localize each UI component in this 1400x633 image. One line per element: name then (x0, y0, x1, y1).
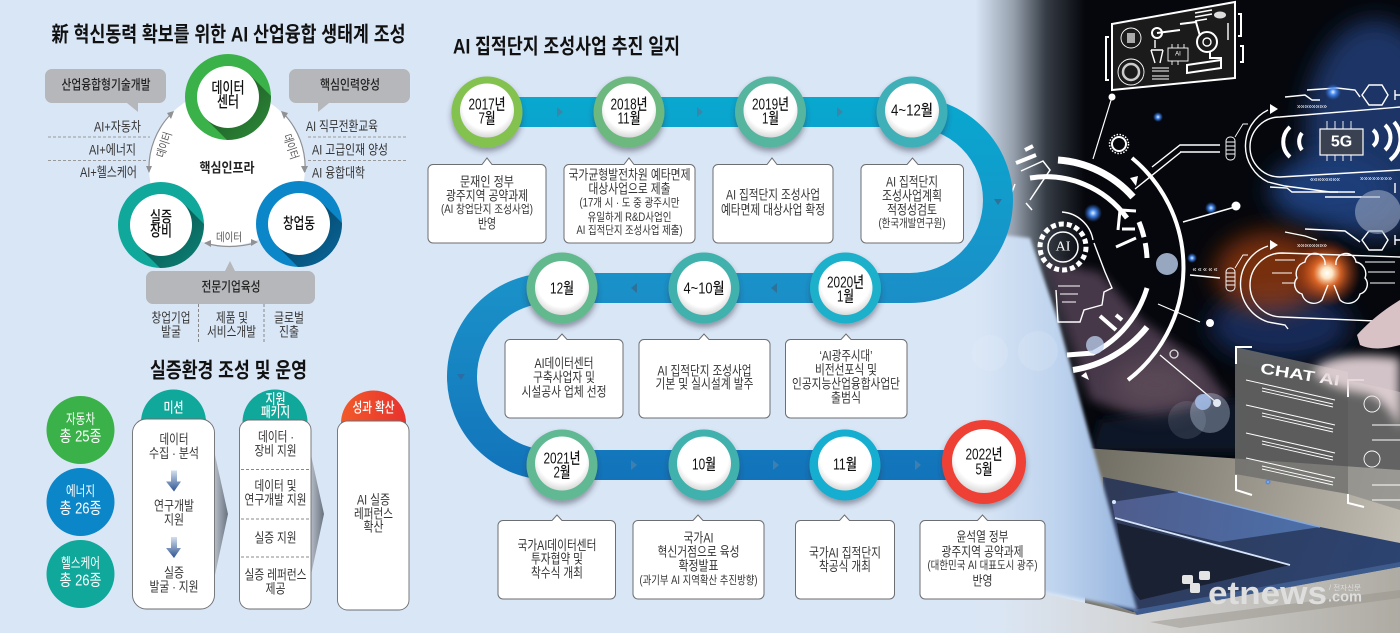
arrow: package to result (311, 455, 324, 575)
panel: support package: 연구개발 지원 (244, 492, 306, 508)
panel: result spread: 성과 확산 (352, 400, 395, 416)
callout: core talent: 핵심인력양성 (320, 78, 380, 92)
photo: laptop and AI hologram (972, 0, 1400, 633)
node: 2020.1 (810, 252, 881, 324)
node: 2018.11: 2018년 (610, 96, 648, 114)
list: industry technology: AI+헬스케어 (80, 165, 137, 180)
box: 2019.1 (713, 158, 833, 243)
node: 2022.5: 2022년 (966, 446, 1002, 464)
box: 12: AI데이터센터 (534, 356, 594, 371)
node: test equipment: 실증 (150, 208, 172, 226)
box: 2020.1: 출범식 (831, 390, 861, 406)
box: 2017.7: 광주지역 공약과제 (446, 188, 528, 204)
panel: healthcare (46, 540, 114, 608)
node: data center: 센터 (217, 93, 239, 111)
box: 2021.2: 착수식 개최 (531, 566, 583, 580)
callout: industry technology: 산업융합형기술개발 (62, 78, 150, 92)
box: 2022.5: 윤석열 정부 (956, 530, 1008, 544)
box: 2020.1 (786, 334, 907, 418)
box: 11: 국가AI 집적단지 (809, 546, 881, 560)
node: startup building: 창업동 (283, 214, 315, 232)
box: 4-12: AI 집적단지 (886, 174, 938, 190)
floor (975, 567, 1400, 633)
logo: etnews: etnews (1208, 575, 1327, 611)
table surface (1085, 448, 1400, 633)
node: 2019.1: 1월 (762, 110, 779, 128)
node: 12 (526, 252, 598, 324)
box: 2021.2 (498, 515, 616, 599)
panel: core infrastructure diagram: 핵심인프라 (200, 160, 255, 176)
callout: specialist companies (146, 261, 315, 304)
hologram: concentric arcs (1012, 146, 1183, 380)
logo: etnews: .com (1328, 588, 1362, 606)
panel: support package: 데이터 및 (254, 478, 296, 494)
heading: ecosystem: 新 혁신동력 확보를 위한 AI 산업융합 생태계 조성 (52, 24, 406, 46)
panel: mission: 수집 · 분석 (149, 446, 199, 461)
panel: result spread: 레퍼런스 (354, 506, 393, 522)
laptop lid (975, 232, 1137, 610)
hand finger (1315, 356, 1400, 430)
panel: result spread: 확산 (364, 520, 384, 534)
panel: energy (46, 468, 114, 536)
hologram: robot arm panel: AI (1175, 52, 1181, 58)
box: 2017.7: 반영 (478, 216, 496, 232)
node: 10: 10월 (692, 456, 716, 474)
node: 11: 11월 (833, 456, 857, 474)
list: industry technology (48, 120, 150, 180)
box: 4-12: (한국개발연구원) (878, 216, 946, 230)
list: core talent (306, 119, 406, 180)
box: 2019.1: 예타면제 대상사업 확정 (721, 202, 825, 218)
list: core talent: AI 융합대학 (312, 166, 365, 180)
box: 2017.7: 문재인 정부 (460, 174, 514, 190)
panel: car (46, 396, 114, 464)
panel: result spread (338, 390, 409, 610)
panel: mission: 실증 (164, 566, 184, 580)
list: industry technology: AI+에너지 (89, 142, 136, 158)
node: test equipment: 장비 (150, 222, 172, 240)
hologram: brain capsule (1190, 229, 1400, 329)
node: data center (185, 54, 271, 140)
hologram: brain capsule: ««««« (1192, 266, 1218, 274)
box: 12: 구축사업자 및 (533, 370, 595, 385)
node: 2018.11: 11월 (618, 110, 640, 128)
logo: etnews: / 전자신문 (1329, 583, 1362, 592)
panel: energy: 에너지 (66, 483, 95, 499)
node: 12: 12월 (550, 280, 574, 298)
box: 2020.1: 비전선포식 및 (815, 362, 877, 378)
node: 4-10 (668, 252, 740, 324)
node: data center: 데이터 (212, 79, 244, 97)
list: core talent: AI 고급인재 양성 (312, 142, 388, 158)
hologram: 5G capsule (1135, 85, 1400, 197)
panel: support package (240, 390, 311, 609)
panel: support package: 실증 지원 (254, 530, 296, 546)
panel: support package: 제공 (266, 582, 286, 596)
box: 2021.2: 국가AI데이터센터 (518, 538, 596, 553)
node: 4-12: 4~12월 (891, 102, 933, 120)
laptop base (1100, 477, 1400, 612)
list: industry technology: AI+자동차 (94, 120, 141, 134)
list: specialist companies: 글로벌 (274, 310, 304, 326)
box: 10 (633, 515, 764, 599)
box: 2017.7: (AI 창업단지 조성사업) (441, 203, 533, 216)
box: 12: 시설공사 업체 선정 (522, 384, 606, 400)
node: 2017.7 (452, 76, 522, 148)
box: 10: 국가AI (684, 530, 714, 546)
node: 4-10: 4~10월 (684, 280, 724, 298)
panel: healthcare: 헬스케어 (61, 555, 100, 571)
box: 4-12 (861, 158, 964, 243)
node: 2021.2 (526, 430, 598, 500)
box: 4-10 (639, 334, 770, 418)
node: 2020.1: 1월 (837, 288, 854, 306)
node: 2020.1: 2020년 (827, 274, 864, 292)
box: 4-10: AI 집적단지 조성사업 (658, 364, 752, 378)
node: 2022.5: 5월 (976, 460, 992, 478)
panel: healthcare: 총 26종 (60, 572, 102, 590)
box: 2017.7 (428, 158, 546, 243)
panel: car: 총 25종 (60, 428, 102, 446)
node: 2018.11 (594, 76, 664, 148)
hologram: 5G capsule: »»»»»»»» (1297, 104, 1327, 110)
logo: etnews (1182, 571, 1362, 611)
list: specialist companies: 서비스개발 (207, 324, 256, 340)
panel: support package: 데이터 · (258, 430, 294, 444)
chat panels: CHAT AI (1259, 360, 1341, 390)
panel: energy: 총 26종 (60, 500, 102, 518)
node: 4-12 (876, 76, 948, 148)
hologram: connector lines (1158, 202, 1240, 439)
callout: industry technology (45, 69, 166, 112)
box: 11 (796, 515, 894, 599)
list: specialist companies (152, 304, 304, 344)
heading: test environment: 실증환경 조성 및 운영 (150, 360, 307, 382)
box: 2018.11: 대상사업으로 제출 (588, 182, 670, 196)
box: 4-12: 조성사업계획 (882, 188, 942, 204)
box: 4-12: 적정성검토 (887, 202, 937, 218)
node: 2017.7: 2017년 (468, 96, 506, 114)
box: 12 (505, 334, 623, 418)
panel: mission: 미션 (164, 400, 184, 416)
hologram: 5G capsule: «««««««« (1310, 176, 1340, 184)
panel: support package: 패키지 (261, 404, 290, 420)
box: 2018.11: 국가균형발전차원 예타면제 (568, 168, 690, 182)
panel: mission: 발굴 · 지원 (150, 580, 198, 594)
panel: core infrastructure diagram: 데이터 (216, 231, 242, 244)
box: 2018.11 (564, 158, 695, 243)
panel: mission: 지원 (164, 512, 184, 528)
panel: mission: 연구개발 (154, 498, 194, 514)
panel: core infrastructure diagram: 데이터 (154, 130, 175, 159)
light particles (1084, 84, 1341, 504)
hologram: robot arm panel (1106, 2, 1243, 90)
list: core talent: AI 직무전환교육 (306, 119, 378, 134)
timeline track (462, 112, 998, 465)
arrow: mission to package (215, 455, 228, 575)
list: specialist companies: 창업기업 (152, 310, 190, 326)
node: test equipment (118, 182, 204, 268)
box: 10: (과기부 AI 지역확산 추진방향) (640, 574, 758, 587)
panel: result spread: AI 실증 (357, 492, 390, 508)
list: specialist companies: 발굴 (161, 324, 181, 340)
node: 2017.7: 7월 (478, 110, 496, 128)
box: 2018.11: AI 집적단지 조성사업 제출) (576, 224, 683, 237)
callout: specialist companies: 전문기업육성 (202, 280, 260, 294)
panel: support package: 지원 (266, 391, 286, 407)
node: 10 (668, 430, 740, 500)
hologram: 5G capsule: 5G (1331, 134, 1352, 150)
box: 2020.1: ‘AI광주시대’ (820, 348, 872, 364)
node: 2022.5 (942, 420, 1026, 504)
box: 2020.1: 인공지능산업융합사업단 (792, 376, 900, 392)
box: 2022.5: (대한민국 AI 대표도시 광주) (928, 559, 1038, 572)
panel: car: 자동차 (66, 411, 95, 427)
list: specialist companies: 진출 (279, 324, 299, 340)
hologram: AI gear and head: AI (1056, 240, 1071, 254)
chat panels (1235, 347, 1400, 510)
box: 10: 확정발표 (678, 558, 718, 574)
node: 2019.1 (735, 76, 806, 148)
box: 2022.5: 반영 (972, 574, 992, 588)
panel: mission: 데이터 (160, 432, 188, 447)
panel: core infrastructure diagram: 데이터 (280, 132, 301, 161)
panel: mission (132, 390, 214, 609)
box: 2022.5: 광주지역 공약과제 (942, 544, 1024, 560)
box: 4-10: 기본 및 실시설계 발주 (656, 376, 754, 392)
callout: core talent (289, 69, 410, 112)
box: 10: 혁신거점으로 육성 (658, 544, 740, 560)
panel: support package: 장비 지원 (254, 444, 296, 458)
box: 2018.11: 유일하게 R&D사업인 (588, 210, 672, 224)
hologram: 5G capsule: »»»»»»»» (1360, 176, 1392, 182)
box: 2019.1: AI 집적단지 조성사업 (726, 188, 820, 202)
node: 2021.2: 2021년 (544, 450, 580, 468)
panel: core infrastructure diagram (118, 54, 342, 268)
core circle (149, 90, 305, 246)
heading: timeline: AI 집적단지 조성사업 추진 일지 (453, 36, 680, 58)
track arrows (457, 107, 1002, 470)
node: 2019.1: 2019년 (752, 96, 789, 114)
box: 2022.5 (920, 515, 1045, 599)
node: 2021.2: 2월 (554, 464, 570, 482)
hologram: AI gear and head (1040, 212, 1112, 322)
box: 2018.11: (17개 시 · 도 중 광주시만 (580, 196, 680, 210)
box: 2021.2: 투자협약 및 (531, 552, 583, 566)
panel: support package: 실증 레퍼런스 (244, 568, 306, 582)
node: 11 (810, 430, 880, 500)
hologram: brain capsule: »»»»»»»» (1297, 242, 1327, 250)
box: 11: 착공식 개최 (819, 559, 871, 574)
node: startup building (256, 181, 342, 267)
list: specialist companies: 제품 및 (216, 310, 248, 326)
